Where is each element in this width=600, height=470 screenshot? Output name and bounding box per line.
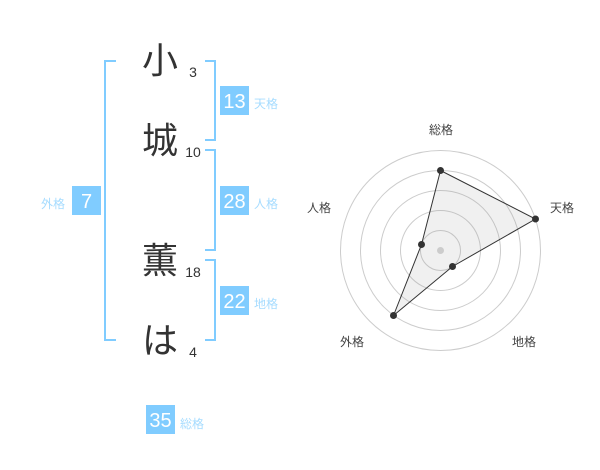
data points — [390, 167, 539, 319]
score box: 総格 35: 35 — [149, 410, 172, 432]
score box: 人格 28 — [220, 186, 249, 215]
stroke count: 3: 3 — [189, 64, 197, 80]
radar data polygon — [394, 170, 536, 316]
character: 城: 城 — [142, 120, 178, 161]
axis labels — [307, 122, 574, 349]
axis labels: 人格 — [307, 200, 331, 215]
score box: 地格 22 — [220, 286, 249, 315]
character: は: は — [142, 320, 178, 361]
score box: 外格 7 — [72, 186, 101, 215]
score box: 人格 28: 28 — [223, 191, 246, 213]
center point — [437, 247, 444, 254]
label: 天格: 天格 — [254, 97, 278, 111]
axis labels: 総格 — [429, 122, 453, 137]
axis labels: 外格 — [340, 334, 364, 349]
score box: 外格 7: 7 — [81, 191, 92, 213]
label: 人格: 人格 — [254, 197, 278, 211]
label: 総格: 総格 — [180, 417, 204, 431]
character: 薫: 薫 — [142, 240, 178, 281]
character: 小: 小 — [142, 40, 178, 81]
stroke count: 10: 10 — [185, 144, 201, 160]
score box: 天格 13: 13 — [223, 91, 246, 113]
score box: 総格 35 — [146, 405, 175, 434]
axis labels: 天格 — [550, 200, 574, 215]
label: 外格: 外格 — [41, 197, 65, 211]
score box: 天格 13 — [220, 86, 249, 115]
stroke count: 4: 4 — [189, 344, 197, 360]
radar grid — [340, 150, 540, 350]
score box: 地格 22: 22 — [223, 291, 246, 313]
label: 地格: 地格 — [254, 297, 278, 311]
axis labels: 地格 — [512, 334, 536, 349]
stroke count: 18: 18 — [185, 264, 201, 280]
